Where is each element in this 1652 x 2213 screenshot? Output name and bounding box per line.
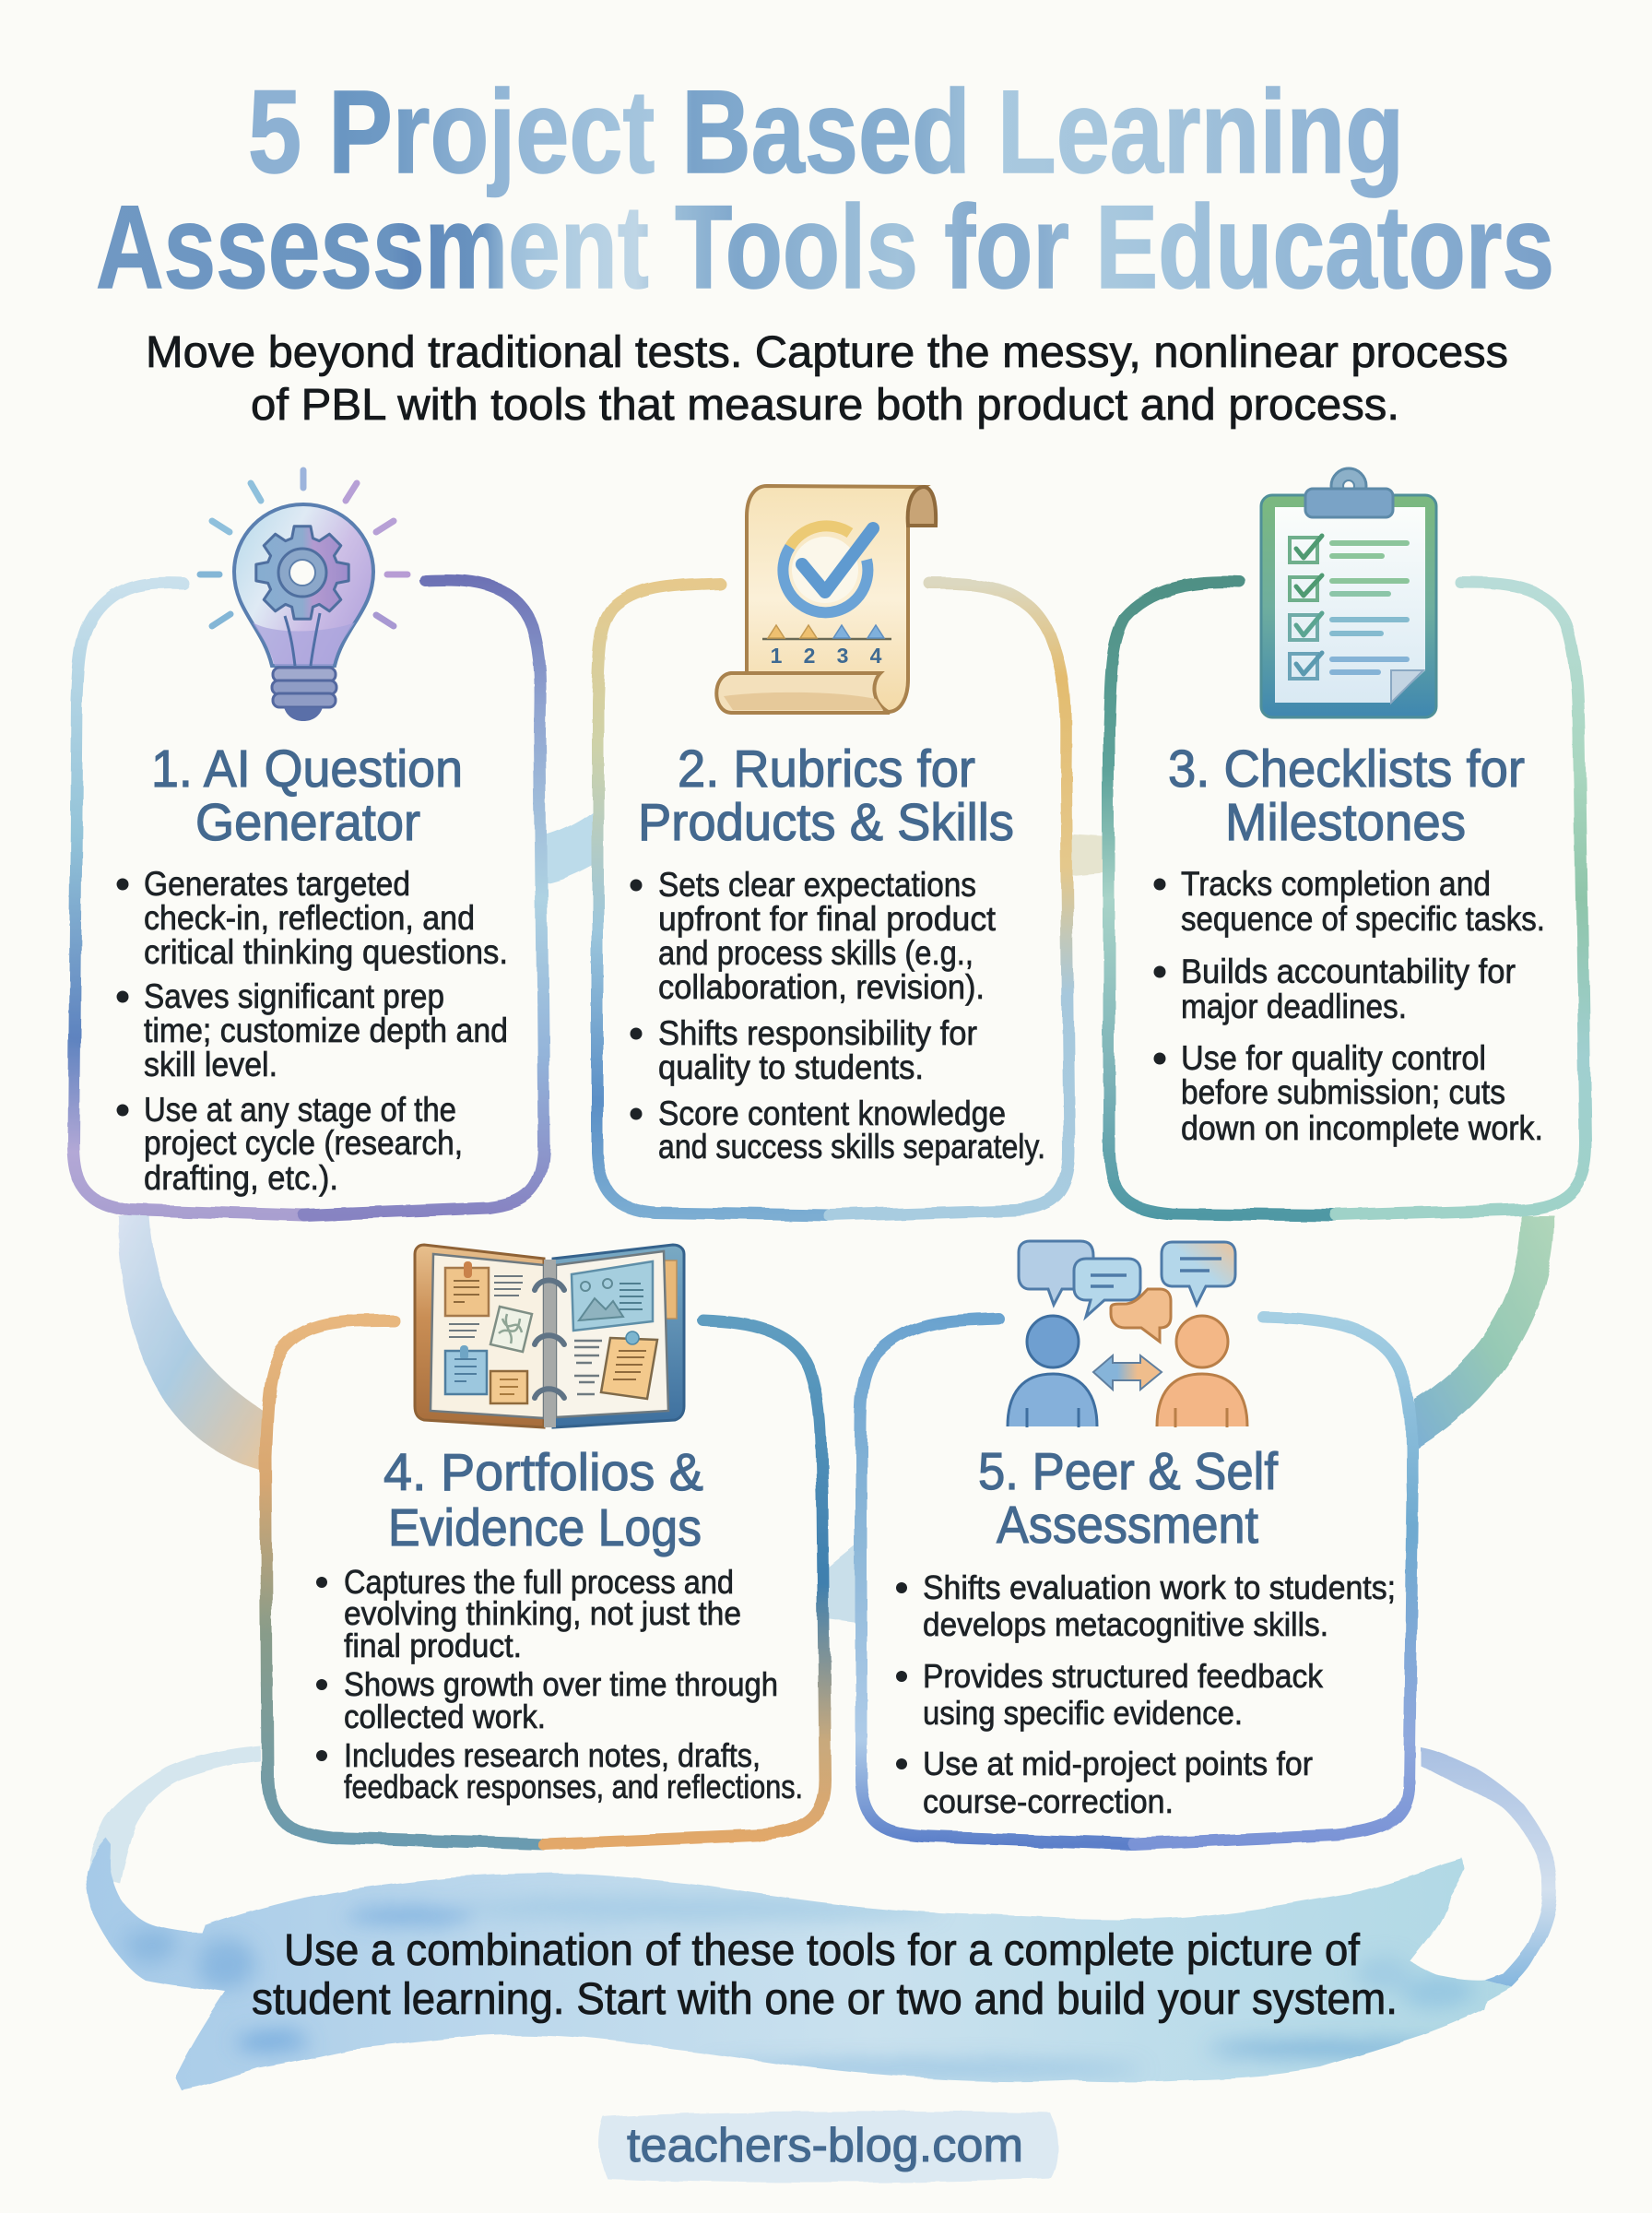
card 2 bullets: Shifts responsibility for [658,1014,977,1052]
card 1 bullets: Generates targeted [144,865,410,903]
card 1 bullets: critical thinking questions. [144,933,508,971]
card 3 bullets: Builds accountability for [1181,953,1516,990]
banner text: Use a combination of these tools for a complete picture of [284,1926,1361,1975]
card 4 bullets: evolving thinking, not just the [344,1594,741,1632]
subtitle [146,328,1508,430]
card 5 heading: 5. Peer & Self [978,1442,1278,1501]
card 1 bullets: Saves significant prep [144,977,444,1015]
card 5 bullets: Shifts evaluation work to students; [923,1568,1396,1606]
card 1 heading [151,740,463,852]
icon: rubric scroll: 1 [771,644,783,668]
footer wash [599,2111,1058,2182]
card 4 bullets: Includes research notes, drafts, [344,1736,761,1774]
panel: card 1 [74,470,544,1215]
card 2 bullets: upfront for final product [658,900,997,938]
card 3 bullets: Use for quality control [1181,1039,1486,1077]
card 3 bullets: down on incomplete work. [1181,1109,1543,1147]
banner connector right loop [1421,1747,1557,1987]
card 5 bullets: Provides structured feedback [923,1657,1324,1695]
card 5 bullets: course-correction. [923,1782,1174,1820]
footer text: teachers-blog.com [627,2119,1023,2172]
card 5 bullets: develops metacognitive skills. [923,1605,1328,1643]
card 4 bullets [316,1563,803,1805]
card 1 bullets: time; customize depth and [144,1012,508,1049]
card 2 bullets: quality to students. [658,1048,924,1086]
title [96,66,1554,314]
icon: rubric scroll: 2 [804,644,815,668]
banner text: student learning. Start with one or two and build your system. [252,1975,1398,2024]
card 2 heading [638,740,1014,852]
card 1 bullets [116,865,508,1197]
banner ribbon [86,1838,1512,2090]
card 3 bullets: sequence of specific tasks. [1181,900,1545,938]
subtitle: Move beyond traditional tests. Capture the messy, nonlinear process [146,328,1508,377]
card 5 bullets [896,1568,1396,1820]
footer: website [599,2111,1058,2182]
card 5 heading: Assessment [997,1496,1258,1555]
connector: card 1 to card 2 [546,807,597,883]
icon detail: gear [256,527,348,619]
subtitle: of PBL with tools that measure both product and process. [251,381,1399,430]
card 3 heading [1168,740,1525,852]
card 3 bullets [1154,865,1545,1147]
icon: rubric scroll: 4 [870,644,882,668]
card 3 heading: 3. Checklists for [1168,740,1525,799]
card 1 bullets: check-in, reflection, and [144,899,475,937]
card 1 bullets: drafting, etc.). [144,1159,338,1197]
card 1 bullets: skill level. [144,1046,277,1083]
connector: card 2 to card 3 [1068,834,1109,876]
card 5 bullets: Use at mid-project points for [923,1745,1313,1782]
card 4 bullets: feedback responses, and reflections. [344,1768,803,1805]
card 3 frame [1109,583,1586,1215]
connector: card 3 to card 5 [1415,1215,1554,1450]
card 4 bullets: final product. [344,1627,522,1664]
banner: closing message [86,1838,1512,2090]
card 1 bullets: project cycle (research, [144,1124,463,1162]
card 4 heading [384,1443,703,1557]
banner connector left swoosh [88,1746,260,1884]
card 1 heading: Generator [195,793,420,852]
card 1 bullets: Use at any stage of the [144,1091,456,1129]
card 5 bullets: using specific evidence. [923,1694,1243,1732]
card 2 bullets: Sets clear expectations [658,866,976,904]
card 2 bullets: and success skills separately. [658,1128,1045,1166]
connector: card 4 to card 5 [823,1544,857,1623]
card 3 bullets: Tracks completion and [1181,865,1491,903]
card 1 heading: 1. AI Question [151,740,463,799]
card 5 heading [978,1442,1278,1555]
card 4 bullets: Captures the full process and [344,1563,734,1601]
card 1 frame [74,581,544,1215]
card 4 heading: 4. Portfolios & [384,1443,703,1502]
card 4 heading: Evidence Logs [388,1498,702,1557]
card 2 heading: Products & Skills [638,793,1014,852]
card 4 frame [266,1320,825,1844]
card 2 frame [597,583,1069,1215]
card 2 bullets: and process skills (e.g., [658,934,974,972]
panel: card 3 [1109,468,1586,1215]
icon: rubric scroll [716,486,936,713]
panel: card 4 [266,1245,825,1844]
card 3 heading: Milestones [1225,793,1466,852]
card 3 bullets: before submission; cuts [1181,1073,1505,1111]
card 4 bullets: Shows growth over time through [344,1665,778,1703]
card 4 bullets: collected work. [344,1698,546,1735]
icon: open portfolio binder [415,1245,684,1427]
icon: rubric scroll: 3 [837,644,848,668]
card 2 heading: 2. Rubrics for [678,740,975,799]
card 2 bullets [631,866,1045,1166]
panel: card 2 [597,486,1069,1215]
icon: light bulb with gear [200,470,407,721]
banner text [252,1926,1398,2024]
panel: card 5 [861,1241,1412,1844]
card 3 bullets: major deadlines. [1181,988,1407,1025]
icon: peer discussion [1008,1241,1247,1427]
title: 5 Project Based Learning [248,66,1404,198]
connector: card 1 to card 4 [118,1215,264,1472]
card 2 bullets: collaboration, revision). [658,968,985,1006]
card 5 frame [861,1317,1412,1844]
card 2 bullets: Score content knowledge [658,1095,1006,1132]
icon: clipboard checklist [1261,468,1436,717]
